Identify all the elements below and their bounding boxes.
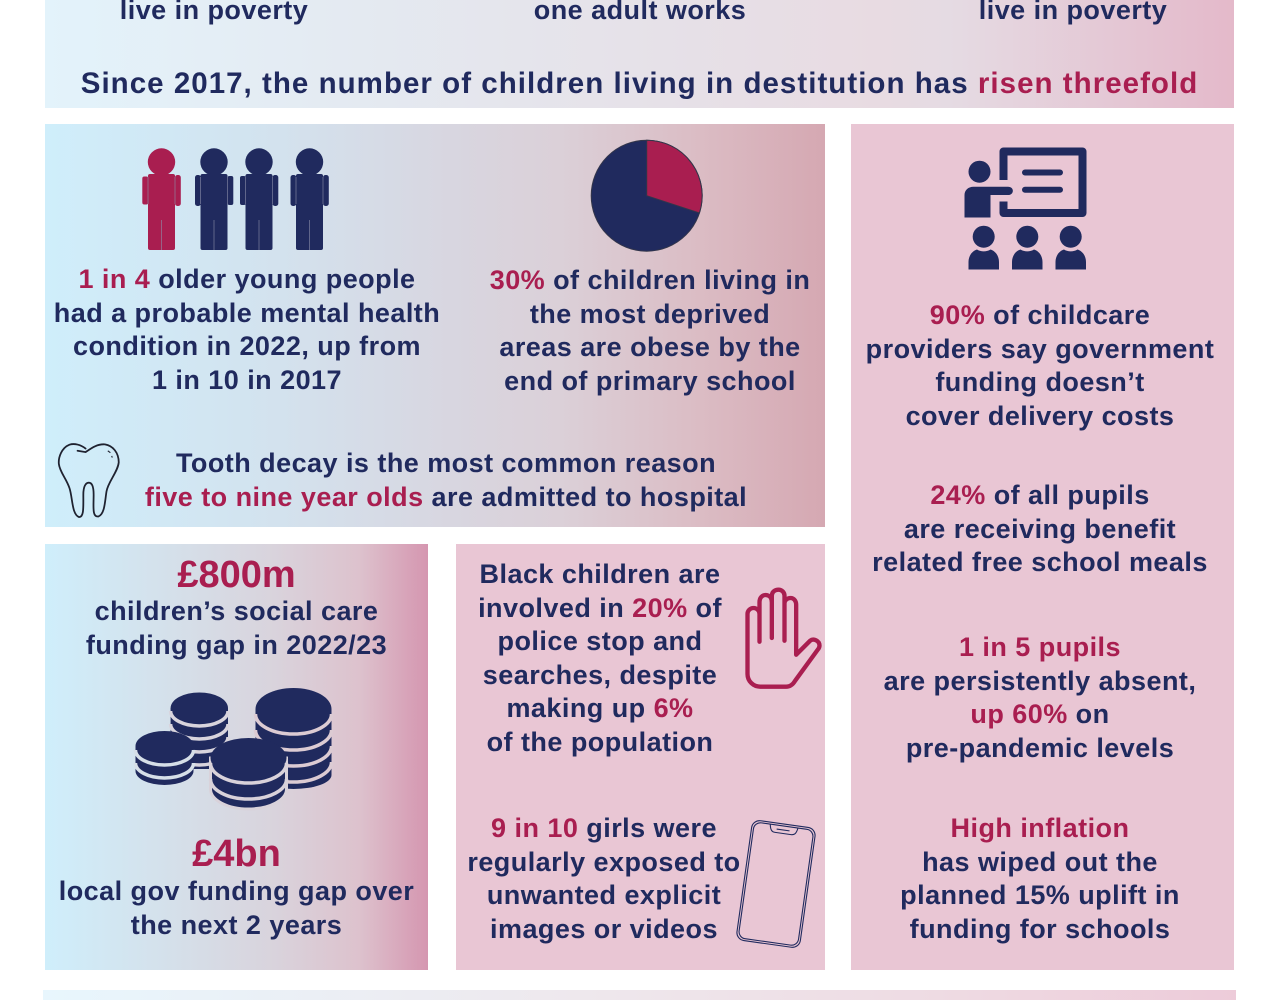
text: local government funding gap: the next 2 years: [131, 910, 342, 940]
text: obesity stat: the most deprived: [530, 298, 770, 328]
panel: funding gaps: [45, 544, 428, 970]
text: childcare funding stat: 90% of childcare: [930, 300, 1150, 330]
panel: policing and online harm: [456, 544, 825, 970]
text: mental health stat: condition in 2022, up from: [73, 331, 421, 361]
text: stop and search stat: [478, 559, 722, 756]
heading: destitution statement: Since 2017, the number of children living in destitution has risen threefold: [81, 67, 1198, 100]
text: explicit images stat: regularly exposed to: [467, 846, 741, 876]
text: tooth decay stat: five to nine year olds are admitted to hospital: [145, 482, 747, 512]
text: stop and search stat: of the population: [487, 726, 713, 756]
text: free school meals stat: [872, 480, 1208, 577]
text: social care funding gap: [86, 596, 387, 660]
text: obesity stat: areas are obese by the: [499, 332, 801, 362]
text: social care funding gap: funding gap in 2022/23: [86, 630, 387, 660]
text: childcare funding stat: providers say government: [866, 334, 1214, 364]
text: £4bn figure: £4bn: [192, 833, 281, 875]
text: mental health stat: 1 in 10 in 2017: [152, 364, 342, 394]
text: inflation stat: planned 15% uplift in: [900, 880, 1180, 910]
text: stop and search stat: making up 6%: [506, 693, 694, 723]
text: mental health stat: [54, 264, 440, 394]
text: free school meals stat: are receiving benefit: [904, 514, 1176, 544]
panel: poverty summary: [45, 0, 1234, 108]
text: local government funding gap: local gov funding gap over: [59, 876, 414, 906]
text: childcare funding stat: funding doesn’t: [935, 367, 1145, 397]
text: tooth decay stat: Tooth decay is the most common reason: [176, 448, 716, 478]
text: obesity stat: end of primary school: [504, 366, 796, 396]
icon: tooth: [58, 443, 120, 518]
text: stop and search stat: police stop and: [498, 626, 702, 656]
text: explicit images stat: [467, 813, 741, 944]
panel: health: [45, 124, 825, 527]
panel: bottom strip: [43, 990, 1236, 1000]
text: inflation stat: [900, 813, 1180, 944]
text: inflation stat: has wiped out the: [922, 846, 1158, 876]
text: inflation stat: High inflation: [951, 813, 1129, 843]
text: explicit images stat: 9 in 10 girls were: [491, 813, 717, 843]
text: explicit images stat: unwanted explicit: [487, 880, 721, 910]
text: mental health stat: 1 in 4 older young people: [78, 264, 416, 294]
text: absence stat: up 60% on: [970, 699, 1110, 729]
text: mental health stat: had a probable mental health: [54, 298, 440, 328]
text: childcare funding stat: [866, 300, 1214, 430]
icon: teacher and pupils: [964, 148, 1086, 270]
text: social care funding gap: children’s social care: [95, 596, 378, 626]
text: childcare funding stat: cover delivery costs: [906, 400, 1174, 430]
text: absence stat: are persistently absent,: [884, 666, 1196, 696]
text: absence stat: [884, 632, 1196, 762]
text: free school meals stat: related free school meals: [872, 547, 1208, 577]
icon: four people, one highlighted: [142, 148, 329, 250]
text: absence stat: 1 in 5 pupils: [959, 632, 1121, 662]
text: £800m figure: £800m: [177, 554, 296, 596]
text: obesity stat: 30% of children living in: [490, 265, 810, 295]
text: inflation stat: funding for schools: [910, 914, 1170, 944]
text: explicit images stat: images or videos: [490, 914, 718, 944]
text: local government funding gap: [59, 876, 414, 940]
text: tooth decay stat: [145, 448, 747, 512]
icon: raised hand: [745, 588, 822, 689]
text: stop and search stat: searches, despite: [483, 660, 717, 690]
text: stop and search stat: involved in 20% of: [478, 592, 722, 622]
panel: education: [851, 124, 1234, 970]
icon: coin stacks: [136, 688, 332, 808]
text: free school meals stat: 24% of all pupils: [930, 480, 1150, 510]
text: absence stat: pre-pandemic levels: [906, 732, 1174, 762]
icon: smartphone: [736, 820, 816, 948]
chart: 30% pie: [590, 140, 703, 252]
text: stop and search stat: Black children are: [480, 559, 720, 589]
text: obesity stat: [490, 265, 810, 396]
